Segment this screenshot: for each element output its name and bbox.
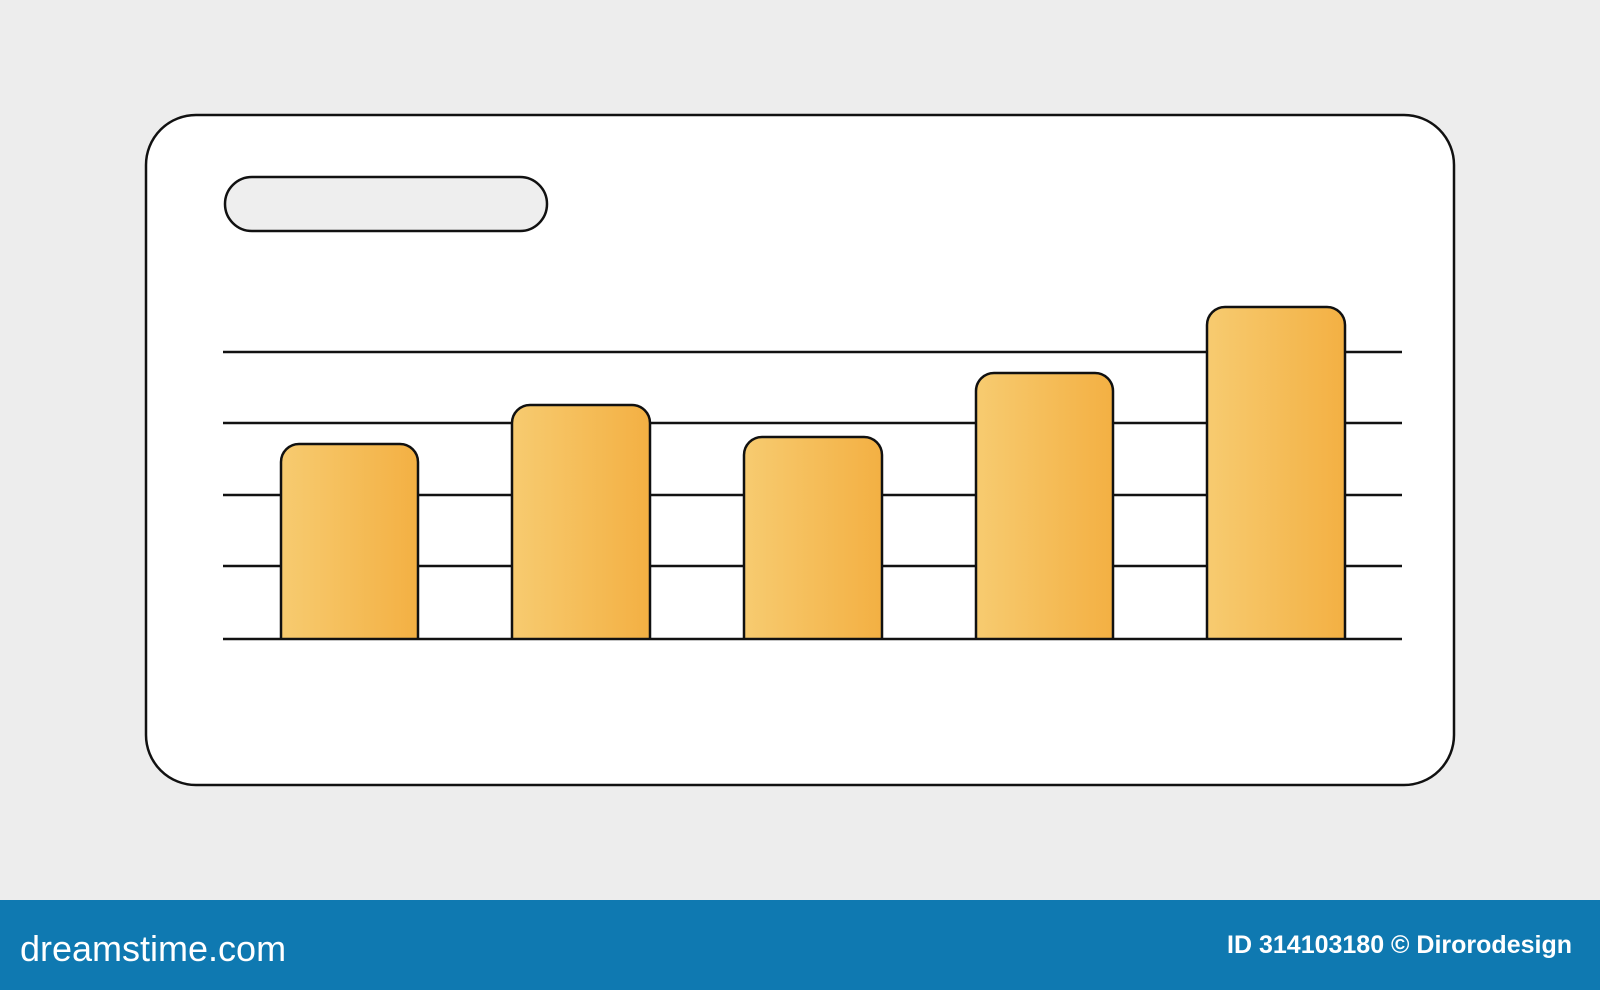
bar chart xyxy=(281,307,1345,639)
title placeholder pill xyxy=(225,177,547,231)
panel: card xyxy=(146,115,1454,785)
footer id text: ID 314103180 © Dirorodesign xyxy=(1227,931,1572,959)
footer logo text: dreamstime.com xyxy=(20,928,286,969)
footer bar xyxy=(0,900,1600,990)
